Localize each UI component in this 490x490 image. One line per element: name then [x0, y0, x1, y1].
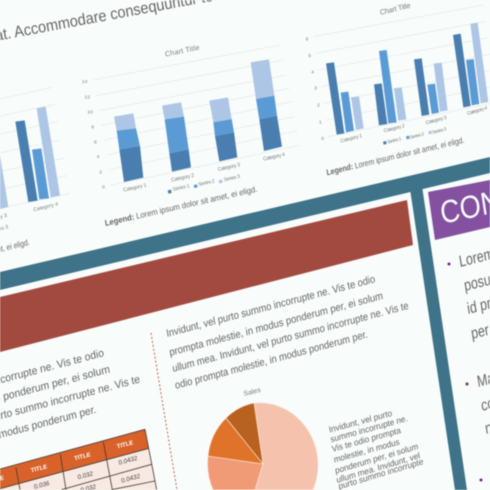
panel divider: horizontal teal band: [0, 157, 490, 290]
text block: right column paragraph: [165, 273, 410, 392]
gridlines and axis: 12: [85, 94, 90, 100]
bars: category 4: [251, 59, 282, 151]
category labels: Category 4: [263, 152, 286, 163]
bars: category 1: [114, 113, 143, 182]
bullet 3: [480, 478, 482, 482]
gridlines and axis: 4: [97, 154, 100, 160]
bars: category 2: [162, 102, 191, 172]
cell values: 0.0432: [118, 455, 139, 467]
panel: centre section header: [0, 200, 413, 352]
series legend: Series 2: [409, 131, 425, 140]
bullet 1: [448, 236, 490, 343]
pie chart: sales: [208, 387, 318, 490]
text block: right column paragraph: Invidunt, vel purto summo incorrupte ne. Vis te odio: [165, 273, 376, 340]
gridlines and axis: 0: [102, 185, 105, 191]
bars: category 2: [374, 50, 406, 125]
text block: pie caption: Invidunt, vel purto: [328, 408, 393, 435]
chart: clustered bars: [306, 1, 490, 145]
cell values: 0.032: [77, 470, 94, 481]
chart: clipped clustered bars: Category 4: [33, 201, 59, 213]
category labels: Category 1: [340, 133, 363, 145]
gridlines and axis: 8: [91, 124, 94, 130]
bars: category 4: [453, 23, 488, 107]
chart: stacked bars: [82, 43, 300, 194]
text block: pie caption: ullum mea. Invidunt, vel: [336, 450, 421, 485]
series legend: Series 1: [172, 183, 190, 193]
series legend: [168, 174, 241, 194]
panel: conclusion header: [428, 158, 490, 240]
table rules: [0, 429, 157, 490]
bars: category 3: [209, 97, 237, 161]
chart title: Chart Title: [164, 43, 200, 59]
text block: pie caption: ponderum per, ei solum: [334, 441, 419, 476]
text block: pie caption: molestie, in modus: [333, 436, 401, 465]
gridlines and axis: [82, 45, 300, 191]
gridlines and axis: 3: [314, 86, 317, 92]
category labels: Category 2: [171, 173, 195, 184]
gridlines and axis: 5: [308, 53, 311, 59]
category labels: Category 2: [383, 123, 406, 134]
chart: clipped clustered bars: [0, 87, 70, 235]
bars: category 3: [414, 58, 448, 116]
series legend: [383, 126, 447, 145]
panel divider: vertical teal band: [410, 186, 467, 490]
cell values: [33, 455, 141, 490]
text block: right column paragraph: prompta molestie, in modus ponderum per, ei solum: [168, 290, 384, 359]
column titles: [0, 440, 134, 486]
category labels: Category 1: [123, 183, 147, 194]
slice: largest: [254, 403, 318, 490]
category labels: [340, 105, 488, 145]
column titles: TITLE: [31, 464, 48, 474]
gridlines and axis: 6: [306, 37, 309, 43]
slice: second: [208, 456, 263, 490]
gridlines and axis: 2: [317, 102, 320, 108]
bullet 2: [466, 360, 490, 438]
column titles: TITLE: [74, 452, 91, 462]
bars: category 1: [326, 62, 364, 135]
column titles: TITLE: [117, 440, 134, 450]
category labels: Category 3: [425, 115, 447, 126]
list: conclusion bullets: [448, 236, 490, 482]
gridlines and axis: 2: [99, 169, 102, 175]
gridlines and axis: 6: [94, 139, 97, 145]
text block: pie caption: [328, 408, 424, 490]
text block: right column paragraph: odio prompta molestie, in modus ponderum per.: [174, 329, 369, 392]
series legend: Series 3: [432, 126, 447, 135]
chart title: Chart Title: [379, 1, 411, 17]
table header: [0, 429, 149, 489]
gridlines and axis: 14: [82, 79, 88, 85]
cell values: 0.0432: [121, 473, 141, 485]
table body: [0, 448, 157, 490]
series legend: Series 2: [198, 178, 215, 188]
series legend: Series 1: [387, 136, 402, 145]
slice: third: [208, 418, 263, 464]
gridlines and axis: 4: [311, 69, 314, 75]
text block: right column paragraph: ullum mea. Invidunt, vel purto summo incorrupte ne. Vis te: [171, 300, 410, 375]
legend text: stacked chart: Legend: Lorem ipsum dolor sit amet, ei eligd.: [104, 184, 258, 228]
text block: pie caption: summo incorrupte ne.: [330, 413, 408, 444]
category labels: Category 3: [217, 162, 241, 173]
divider: dashed column rule: [151, 333, 177, 490]
pie title: Sales: [243, 387, 262, 398]
category labels: Category 4: [467, 105, 488, 117]
slice: fourth: [226, 403, 263, 464]
category labels: [123, 152, 286, 194]
gridlines and axis: 0: [321, 136, 324, 142]
gridlines and axis: [306, 5, 490, 142]
legend text: clustered chart: Legend: Lorem ipsum dolor sit amet, ei eligd.: [326, 135, 465, 177]
gridlines and axis: 10: [87, 110, 93, 116]
text block: left column paragraph: [0, 347, 141, 471]
gridlines and axis: 1: [319, 119, 322, 125]
series legend: Series 3: [223, 174, 241, 183]
text block: pie caption: Vis te odio prompta: [331, 425, 402, 454]
table: [0, 429, 157, 490]
